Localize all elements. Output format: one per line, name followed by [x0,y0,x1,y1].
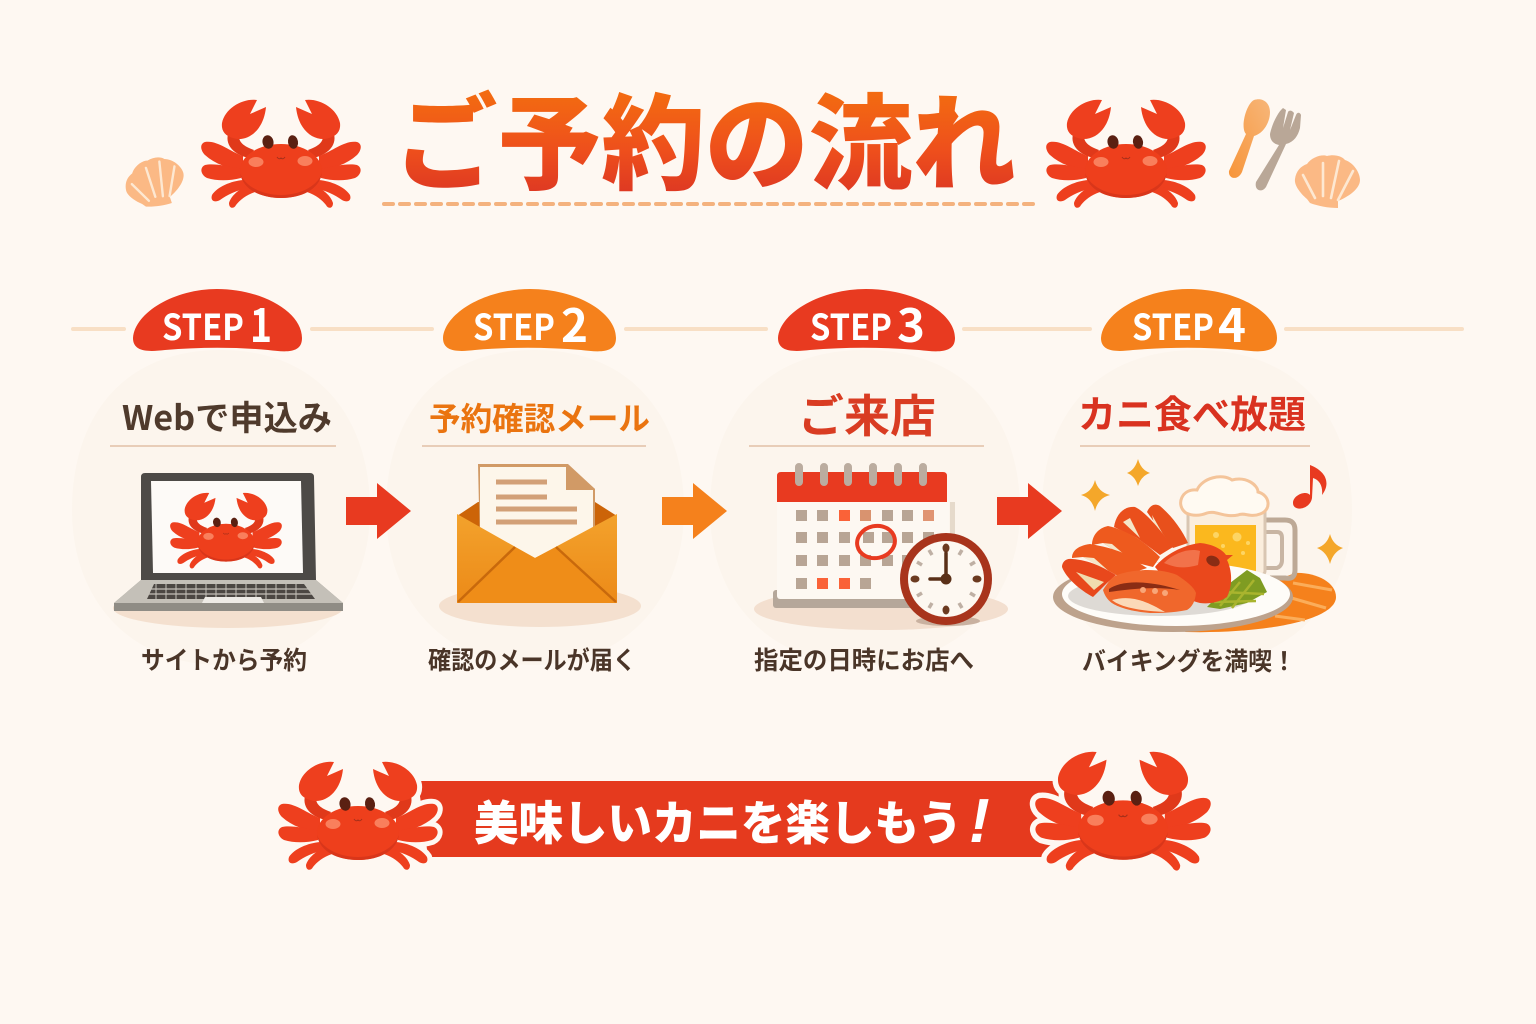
step 3 badge: 3 [897,290,925,356]
step 1 caption: サイトから予約 [141,641,307,677]
step 2 heading: 予約確認メール [429,394,650,440]
step 3 badge: STEP [810,299,892,351]
step 2 badge [443,289,616,356]
step 3 heading: ご来店 [798,380,936,445]
beer mug [1265,520,1295,578]
arrow: step 2 to 3 [662,483,727,539]
banner: 美味しいカニを楽しもう [474,785,962,854]
step 2 badge: STEP [473,299,555,351]
step 3 background [710,350,1020,665]
step 4 heading: カニ食べ放題 [1078,384,1306,439]
step 2 badge: 2 [561,290,588,356]
icon: right title crab [1046,100,1206,208]
step 3 caption: 指定の日時にお店へ [754,641,974,677]
step 1 badge: STEP [162,299,244,351]
crab legs [1147,505,1188,548]
panel: step 3 [710,289,1020,677]
icon: crab plate with beer [1053,459,1343,632]
panel: step 2 [386,289,684,677]
icon: left title shell [119,151,191,215]
banner: ! [969,787,990,856]
crab shell [1155,543,1233,603]
step 4 background [1042,350,1352,665]
plate [1053,562,1293,632]
step 4 badge: 4 [1218,290,1246,356]
step 1 badge [133,289,302,356]
panel: step 4 [1042,289,1352,678]
music note [1293,465,1326,509]
sparkles [1081,459,1343,564]
step 3 badge [778,289,955,356]
step 1 badge: 1 [250,290,272,356]
title: ご予約の流れ [394,60,1016,211]
arrow: step 1 to 2 [346,483,411,539]
step 4 caption: バイキングを満喫！ [1082,642,1296,678]
arrow: step 3 to 4 [997,483,1062,539]
icon: spoon and fork [1229,99,1301,190]
orange tray [1185,573,1336,632]
icon: banner left crab [278,762,438,870]
icon: laptop with crab [113,473,343,628]
crab claw [1103,570,1196,613]
step 2 background [386,350,684,665]
step 2 caption: 確認のメールが届く [428,641,636,677]
step connector lines [73,327,1462,331]
icon: right title shell [1295,155,1360,208]
icon: left title crab [201,100,361,208]
step 4 badge: STEP [1132,299,1214,351]
icon: calendar and clock [754,467,1008,630]
icon: banner right crab [1035,752,1211,871]
step 1 background [72,350,370,665]
icon: envelope with letter [439,464,641,627]
panel: step 1 [72,289,370,677]
green garnish [1207,570,1267,609]
step 1 heading: Webで申込み [122,391,332,440]
step 4 badge [1101,289,1277,356]
